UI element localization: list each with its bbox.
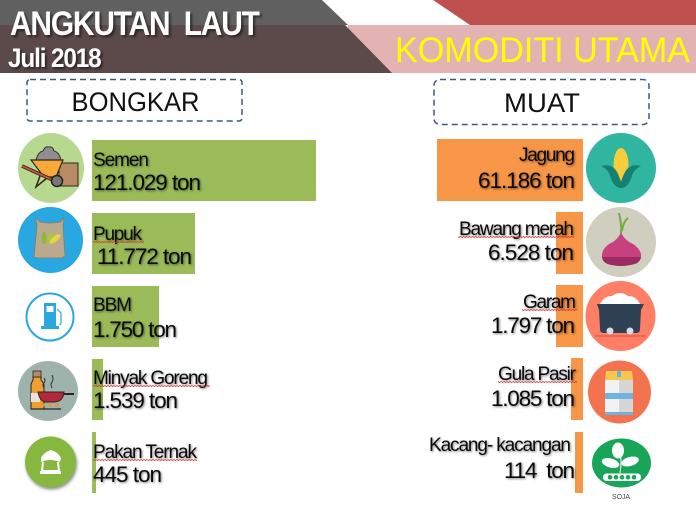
muat row: garam — [491, 281, 656, 351]
icon: wheelbarrow with cement — [18, 133, 84, 203]
box: muat: MUAT — [504, 88, 580, 118]
bongkar row: pakan ternak — [25, 432, 198, 493]
box: bongkar — [27, 80, 242, 121]
value: 61.186 ton — [478, 168, 575, 193]
label: Jagung — [519, 145, 575, 166]
title: ANGKUTAN LAUT — [10, 4, 260, 42]
label: Kacang- kacangan — [429, 435, 571, 456]
label: Garam — [523, 292, 576, 313]
bar — [575, 432, 583, 493]
icon: sugar pack — [588, 360, 651, 424]
bar — [571, 358, 583, 420]
muat row: kacang-kacangan — [429, 432, 651, 501]
icon: fertilizer sack — [18, 207, 83, 273]
icon: soja logo — [592, 438, 651, 501]
bar — [556, 212, 583, 274]
bar — [92, 432, 96, 493]
soja caption: SOJA — [612, 492, 630, 501]
bar — [92, 213, 195, 274]
icon: oil and frying pan — [18, 361, 78, 421]
muat row: bawang merah — [458, 207, 656, 277]
label: Pakan Ternak — [93, 442, 198, 463]
header banner — [0, 0, 696, 73]
value: 114 ton — [504, 458, 575, 483]
value: 1.539 ton — [93, 388, 178, 413]
value: 1.085 ton — [491, 386, 575, 411]
icon: red onion — [586, 207, 656, 277]
bongkar row: minyak goreng — [18, 359, 210, 421]
bar — [92, 359, 103, 420]
value: 6.528 ton — [488, 240, 574, 265]
label: Gula Pasir — [498, 364, 577, 385]
bar — [92, 286, 159, 347]
label: Bawang merah — [459, 219, 574, 240]
bongkar row: pupuk — [18, 207, 195, 274]
icon: feed — [25, 436, 76, 488]
value: 1.750 ton — [93, 317, 177, 342]
label: BBM — [93, 295, 132, 316]
value: 1.797 ton — [491, 313, 575, 338]
icon: corn — [586, 133, 656, 203]
bar — [437, 139, 583, 201]
value: 121.029 ton — [93, 170, 201, 195]
heading: komoditi utama: KOMODITI UTAMA — [395, 31, 691, 70]
value: 11.772 ton — [97, 244, 192, 269]
muat row: jagung — [437, 133, 656, 203]
label: Semen — [93, 150, 149, 171]
box: muat — [434, 80, 649, 124]
value: 445 ton — [93, 462, 162, 487]
bar — [92, 140, 316, 201]
icon: fuel pump — [26, 294, 74, 340]
muat row: gula pasir — [491, 358, 651, 424]
bar — [556, 285, 583, 347]
label: Minyak Goreng — [93, 368, 208, 389]
bongkar row: semen — [18, 133, 316, 203]
icon: salt cart — [586, 281, 656, 351]
box: bongkar: BONGKAR — [72, 87, 200, 117]
bongkar row: bbm — [26, 286, 177, 347]
subtitle: Juli 2018 — [8, 44, 102, 73]
label: Pupuk — [93, 224, 142, 245]
